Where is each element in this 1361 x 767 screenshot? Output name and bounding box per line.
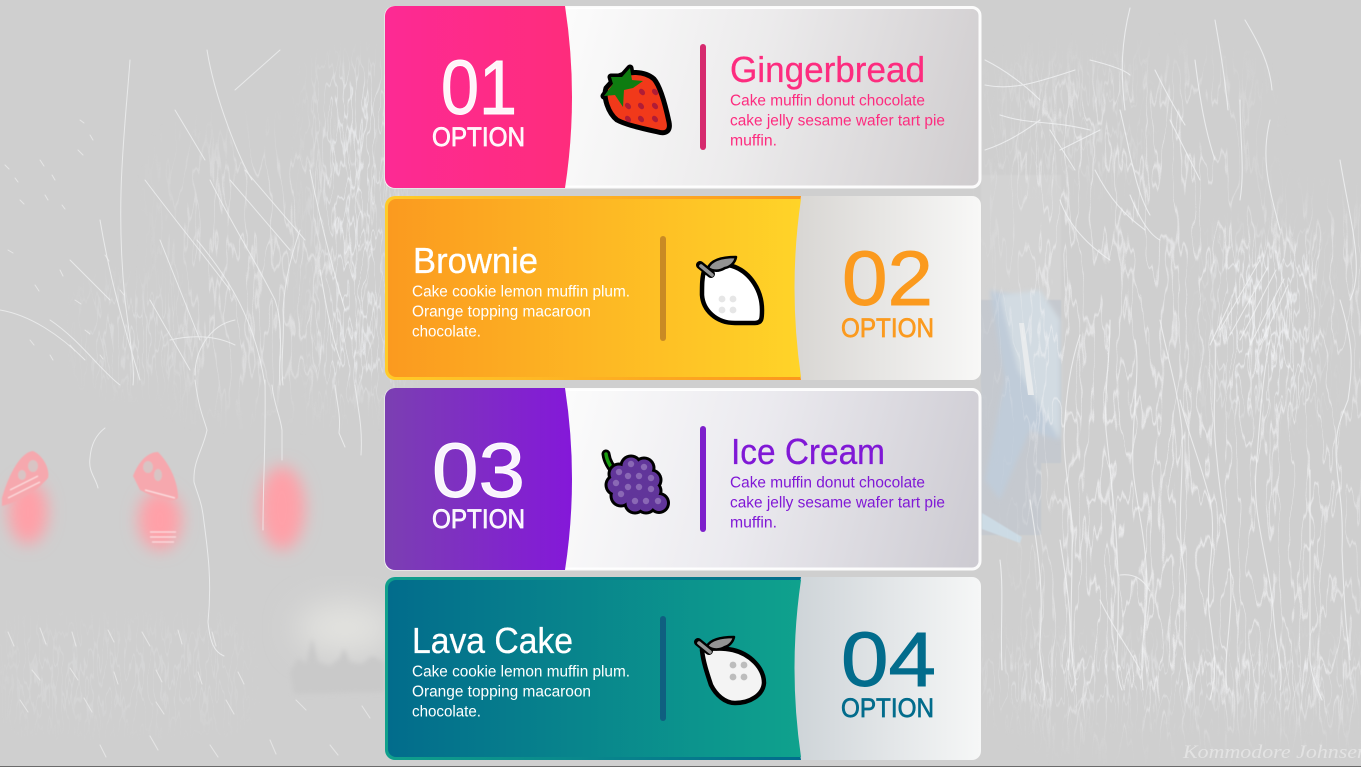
number tab 03: OPTION [432, 504, 525, 534]
divider [660, 236, 666, 341]
lit stage panel and blue lights [981, 175, 1061, 543]
divider [660, 616, 666, 721]
text block: Cake muffin donut chocolate [730, 474, 925, 492]
streaks: crowd [8, 628, 370, 757]
divider [700, 44, 706, 150]
text block: muffin. [730, 132, 777, 150]
text block: chocolate. [412, 324, 481, 340]
panel: option 04 Lava Cake [385, 577, 981, 760]
number tab 02 [385, 196, 934, 380]
text block: cake jelly sesame wafer tart pie [730, 112, 945, 130]
streaks: right side [985, 8, 1356, 700]
number tab 02: 02 [842, 236, 933, 322]
icon: lemon [700, 257, 762, 323]
text block: cake jelly sesame wafer tart pie [730, 494, 945, 512]
text block [730, 49, 945, 150]
panel: option 02 Brownie [385, 196, 981, 380]
text block: muffin. [730, 514, 777, 532]
number tab 02: OPTION [841, 313, 934, 343]
streaks: left side [0, 50, 361, 656]
text block [730, 431, 945, 532]
number tab 03: 03 [432, 428, 525, 514]
panel: option 01 Gingerbread [385, 6, 980, 188]
text block: Ice Cream [731, 431, 885, 472]
text block: Orange topping macaroon [412, 684, 591, 700]
icon: pear [698, 637, 764, 703]
icon: strawberry [604, 68, 669, 133]
number tab 01: 01 [441, 45, 517, 131]
text block: Brownie [413, 240, 538, 281]
text block [412, 240, 630, 340]
generated streak texture [180, 73, 1361, 732]
divider [700, 426, 706, 532]
text block: chocolate. [412, 704, 481, 720]
text block: Gingerbread [730, 49, 925, 90]
text block: Cake cookie lemon muffin plum. [412, 284, 630, 300]
icon: grapes [604, 454, 670, 514]
number tab 04 [385, 577, 936, 760]
text block: Lava Cake [412, 620, 573, 661]
text block: Orange topping macaroon [412, 304, 591, 320]
text block [412, 620, 630, 720]
watermark: Kommodore Johnsen [1182, 742, 1361, 763]
number tab 01 [385, 6, 572, 188]
number tab 04: OPTION [841, 693, 934, 723]
text block: Cake cookie lemon muffin plum. [412, 664, 630, 680]
number tab 03 [385, 388, 572, 570]
number tab 01: OPTION [432, 122, 525, 152]
text block: Cake muffin donut chocolate [730, 92, 925, 110]
panel: option 03 Ice Cream [385, 388, 980, 570]
number tab 04: 04 [841, 617, 936, 703]
